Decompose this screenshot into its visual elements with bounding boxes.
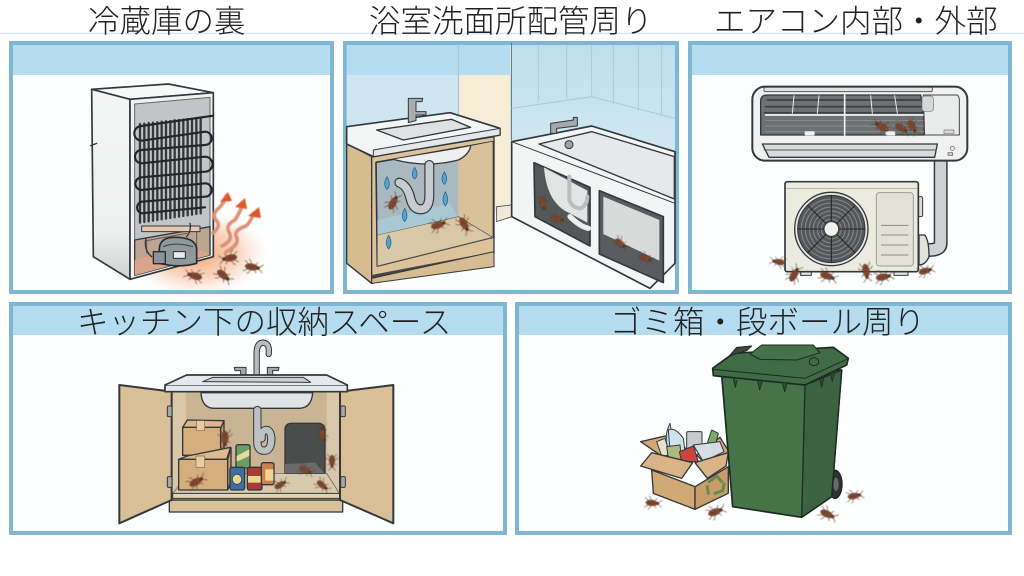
header band	[692, 45, 1008, 75]
illustration: cardboard box with rubbish	[641, 423, 730, 509]
cockroaches in the cabinet	[185, 425, 338, 496]
cockroaches near the bin	[644, 488, 865, 525]
cockroaches on the units	[769, 115, 936, 287]
panel: under-kitchen storage	[11, 304, 505, 533]
outdoor unit	[801, 271, 811, 275]
panel frame	[11, 304, 505, 533]
indoor unit	[752, 87, 967, 161]
bathtub	[512, 126, 675, 288]
icon: green wheelie bin	[713, 345, 848, 517]
title: 冷蔵庫の裏: 冷蔵庫の裏	[88, 3, 246, 39]
title: 浴室洗面所配管周り: 浴室洗面所配管周り	[369, 3, 653, 39]
header band	[13, 306, 503, 335]
title: キッチン下の収納スペース: キッチン下の収納スペース	[77, 304, 451, 340]
title: エアコン内部・外部: エアコン内部・外部	[714, 3, 998, 39]
countertop, basin and faucet	[257, 343, 269, 375]
panel: bathroom and washroom plumbing	[345, 43, 677, 292]
wall opening	[285, 423, 325, 473]
refrigerant pipe	[929, 159, 941, 250]
illustration: indoor and outdoor units	[752, 87, 967, 275]
trap pipe	[257, 410, 271, 451]
illustration: refrigerator with coils and compressor	[91, 84, 267, 295]
panel frame	[690, 43, 1010, 292]
panel frame	[11, 43, 332, 292]
cockroaches around the pipes	[382, 190, 656, 267]
illustration: washbasin cabinet and bathtub	[347, 43, 675, 288]
doors	[119, 385, 172, 523]
illustration: open sink cabinet	[119, 343, 393, 523]
cardboard boxes	[183, 420, 224, 428]
title: ゴミ箱・段ボール周り: ゴミ箱・段ボール周り	[610, 304, 925, 340]
panel: air conditioner	[690, 43, 1010, 292]
panel: trash bin and cardboard	[517, 304, 1010, 533]
food cans	[236, 445, 250, 468]
cockroaches by the compressor	[182, 249, 264, 288]
panel frame	[517, 304, 1010, 533]
icon: heat arrows	[213, 192, 261, 252]
header band	[13, 45, 330, 75]
header band	[519, 306, 1008, 335]
panel: behind the refrigerator	[11, 43, 332, 295]
washbasin cabinet	[347, 143, 372, 283]
panel frame	[345, 43, 677, 292]
